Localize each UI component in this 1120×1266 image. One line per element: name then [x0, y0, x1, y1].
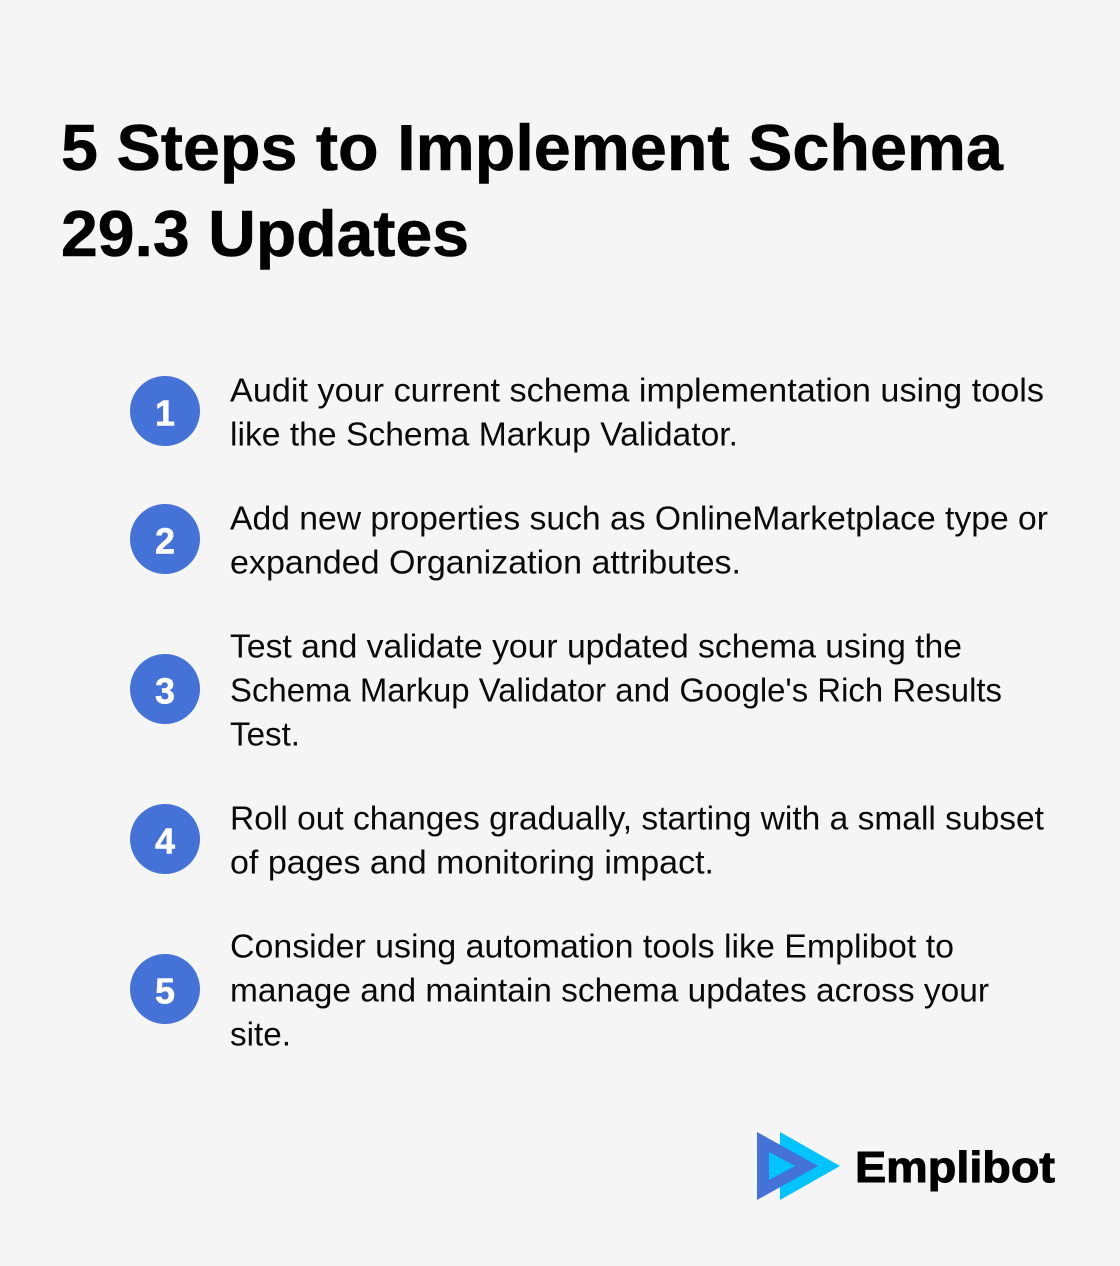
step 4	[130, 800, 1044, 880]
title: 5 Steps to Implement Schema	[61, 111, 1004, 184]
step 5 number badge: 5	[155, 970, 175, 1012]
step 2 text	[230, 500, 1048, 580]
step 3	[130, 628, 1002, 752]
step 5 text: Consider using automation tools like Emplibot to	[230, 928, 954, 964]
step 2 text: expanded Organization attributes.	[230, 544, 741, 580]
step 1 number badge: 1	[155, 392, 175, 434]
step 2 number badge: 2	[155, 520, 175, 562]
step 5 text: site.	[230, 1016, 291, 1052]
title: 29.3 Updates	[61, 197, 469, 270]
step 3 number badge	[130, 654, 200, 724]
step 3 number badge: 3	[155, 670, 175, 712]
step 1 text	[230, 372, 1044, 452]
step 1 number badge	[130, 376, 200, 446]
step 4 number badge: 4	[155, 820, 175, 862]
step 1 text: Audit your current schema implementation using tools	[230, 372, 1044, 408]
step 4 number badge	[130, 804, 200, 874]
step 5 text	[230, 928, 989, 1052]
step 3 text: Test.	[230, 716, 300, 752]
step 2	[130, 500, 1048, 580]
icon: play triangles	[757, 1132, 840, 1200]
step 1 text: like the Schema Markup Validator.	[230, 416, 738, 452]
logo wordmark: Emplibot	[855, 1143, 1055, 1192]
step 4 text: of pages and monitoring impact.	[230, 844, 714, 880]
step 4 text: Roll out changes gradually, starting with a small subset	[230, 800, 1044, 836]
title	[61, 111, 1004, 270]
step 4 text	[230, 800, 1044, 880]
step 3 text: Schema Markup Validator and Google's Rich Results	[230, 672, 1002, 708]
step 1	[130, 372, 1044, 452]
step 3 text: Test and validate your updated schema using the	[230, 628, 962, 664]
logo: Emplibot	[757, 1132, 1055, 1200]
step 5	[130, 928, 989, 1052]
step 5 text: manage and maintain schema updates across your	[230, 972, 989, 1008]
step 3 text	[230, 628, 1002, 752]
step 2 text: Add new properties such as OnlineMarketplace type or	[230, 500, 1048, 536]
step 5 number badge	[130, 954, 200, 1024]
step 2 number badge	[130, 504, 200, 574]
